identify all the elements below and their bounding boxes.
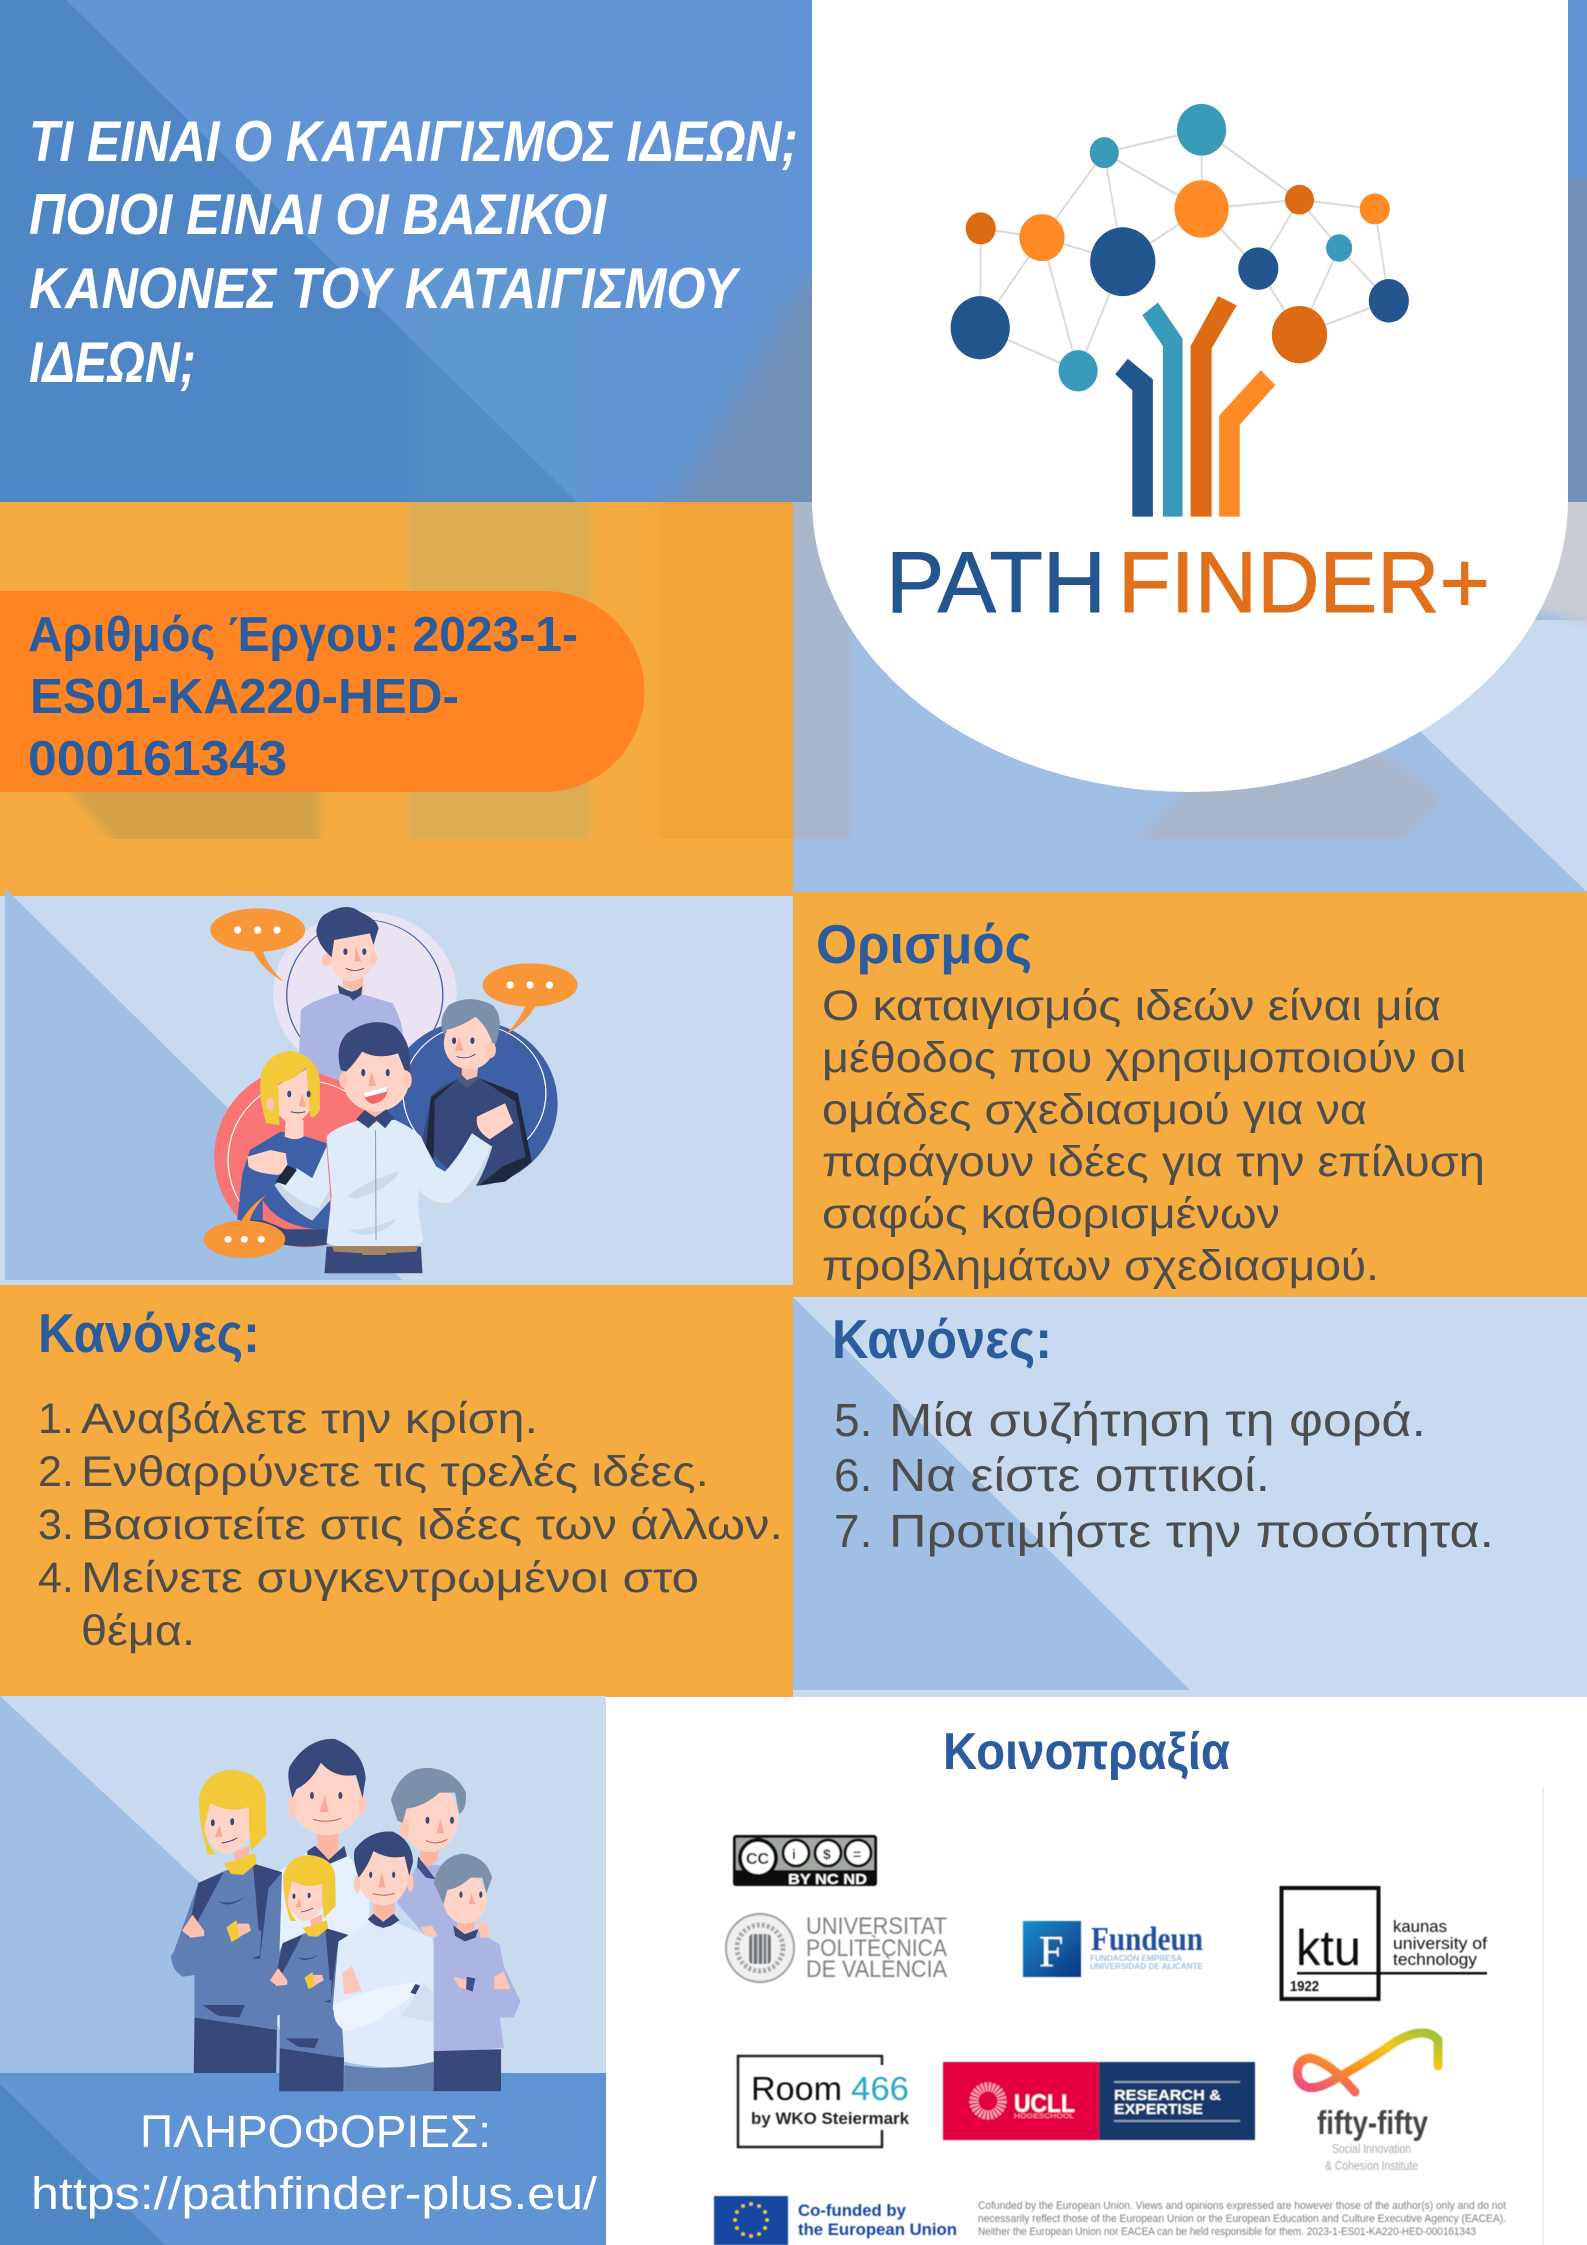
heading: definition: Ορισμός [816, 913, 1032, 975]
logo: KTU: 1922 [1290, 1978, 1319, 1995]
callout: project number pill [0, 591, 644, 792]
definition text: Ο καταιγισμός ιδεών είναι μία [822, 982, 1441, 1030]
logo: co-funded by the European Union: the European Union [798, 2220, 957, 2239]
logo: creative commons badge [733, 1835, 877, 1888]
logo: Room 466 [738, 2056, 910, 2147]
logo: KTU [1282, 1888, 1487, 1999]
definition text [822, 982, 1485, 1290]
logo: creative commons badge: CC [746, 1851, 770, 1868]
logo: Fundeun: F [1039, 1927, 1063, 1976]
logo: creative commons badge: i [792, 1846, 796, 1862]
logo: fifty-fifty: & Cohesion Institute [1325, 2158, 1418, 2173]
definition text: σαφώς καθορισμένων [822, 1190, 1280, 1238]
logo: creative commons badge: = [853, 1846, 861, 1862]
logo: fifty-fifty: fifty-fifty [1317, 2104, 1429, 2141]
icon: Pathfinder tree logo [951, 104, 1409, 517]
callout: project number pill: 000161343 [28, 732, 287, 786]
logo: Fundeun: FUNDACIÓN EMPRESA [1090, 1954, 1182, 1963]
disclaimer text: Cofunded by the European Union. Views and opinions expressed are however those of the author(s) only and do not [978, 2200, 1506, 2212]
logo: Universitat Politecnica de Valencia: DE VALÈNCIA [806, 1956, 947, 1983]
logo: Fundeun: Fundeun [1091, 1921, 1203, 1958]
rules list 1-4: Ενθαρρύνετε τις τρελές ιδέες. [81, 1448, 709, 1496]
illustration: group of people talking [204, 907, 578, 1273]
logo: fifty-fifty: Social Innovation [1332, 2141, 1411, 2156]
logo: creative commons badge: $ [823, 1846, 831, 1862]
title: ΙΔΕΩΝ; [29, 330, 196, 395]
logo wordmark: FINDER+ [1118, 535, 1490, 631]
big woman [171, 1770, 282, 2073]
rules list 1-4: Βασιστείτε στις ιδέες των άλλων. [81, 1501, 783, 1549]
logo: Universitat Politecnica de Valencia: UNIVERSITAT [806, 1913, 947, 1940]
rules list 5-7: Να είστε οπτικοί. [889, 1449, 1270, 1501]
speaking man [274, 1147, 331, 1221]
logo: Universitat Politecnica de Valencia: POLITÈCNICA [806, 1935, 947, 1962]
big man [261, 1853, 370, 2044]
logo wordmark [886, 535, 1490, 631]
logo: KTU: ktu [1296, 1920, 1361, 1976]
bubbles [253, 951, 283, 982]
small older man [434, 1927, 520, 2055]
panel: team illustration and information [0, 1696, 606, 2245]
logo: co-funded by the European Union [714, 2196, 957, 2245]
information text: ΠΛΗΡΟΦΟΡΙΕΣ: [140, 2106, 491, 2157]
logo: Room 466: by WKO Steiermark [751, 2109, 910, 2128]
logo: Room 466: 466 [851, 2070, 909, 2107]
rules list 5-7: 6. [834, 1449, 872, 1501]
logo: UCLL research and expertise [943, 2062, 1255, 2140]
logo: fifty-fifty [1298, 2033, 1438, 2173]
information text [31, 2106, 598, 2219]
logo: Fundeun [1023, 1921, 1204, 1977]
rules list 5-7: Μία συζήτηση τη φορά. [889, 1394, 1426, 1446]
title [29, 109, 798, 395]
rules list 1-4: Μείνετε συγκεντρωμένοι στο [81, 1554, 699, 1602]
logo: Universitat Politecnica de Valencia [726, 1913, 947, 1983]
definition text: παράγουν ιδέες για την επίλυση [822, 1138, 1485, 1186]
rules list 5-7: Προτιμήστε την ποσότητα. [889, 1505, 1494, 1557]
callout: project number pill: Αριθμός Έργου: 2023-1- [28, 608, 578, 662]
panel: consortium logos [606, 1697, 1587, 2245]
logo wordmark: PATH [886, 535, 1106, 631]
panel: rules 5-7 [793, 1297, 1587, 1697]
callout: project number pill: ES01-KA220-HED- [30, 670, 459, 724]
rules list 1-4: 1. [38, 1395, 74, 1443]
panel: rules 1-4 [0, 1285, 793, 1697]
logo: co-funded by the European Union: Co-funded by [798, 2201, 907, 2220]
logo: Fundeun: UNIVERSIDAD DE ALICANTE [1090, 1962, 1204, 1971]
definition text: μέθοδος που χρησιμοποιούν οι [822, 1034, 1466, 1082]
rules list 1-4: 2. [38, 1448, 74, 1496]
logo: UCLL research and expertise: RESEARCH & [1114, 2087, 1221, 2104]
rules list 1-4: Αναβάλετε την κρίση. [81, 1395, 538, 1443]
rules list 1-4: 4. [38, 1554, 74, 1602]
logo: KTU: kaunas [1393, 1917, 1447, 1936]
logo: KTU: technology [1393, 1950, 1478, 1969]
title: ΚΑΝΟΝΕΣ ΤΟΥ ΚΑΤΑΙΓΙΣΜΟΥ [29, 256, 742, 321]
disclaimer text: necessarily reflect those of the European Union or the European Education and Culture Executive Agency (EACEA). [978, 2213, 1506, 2225]
blonde woman [237, 1132, 332, 1230]
small woman [261, 1855, 348, 2091]
logo: UCLL research and expertise: EXPERTISE [1114, 2101, 1203, 2118]
disclaimer text: Neither the European Union nor EACEA can be held responsible for them. 2023-1-ES01-KA220-HED-000161343 [978, 2226, 1476, 2238]
rules list 1-4 [38, 1395, 783, 1655]
rules list 1-4: 3. [38, 1501, 74, 1549]
title: ΤΙ ΕΙΝΑΙ Ο ΚΑΤΑΙΓΙΣΜΟΣ ΙΔΕΩΝ; [29, 109, 798, 174]
back man [298, 993, 403, 1087]
illustration: team of six people [171, 1739, 520, 2091]
rules list 1-4: θέμα. [81, 1607, 195, 1655]
information text: https://pathfinder-plus.eu/ [31, 2168, 598, 2219]
front man [333, 1924, 443, 2067]
logo: KTU: university of [1393, 1934, 1487, 1953]
logo: Room 466: Room [751, 2070, 842, 2107]
heading: rules right: Κανόνες: [832, 1308, 1052, 1370]
rules list 5-7: 7. [834, 1505, 872, 1557]
big older man [397, 1863, 459, 1938]
panel: top blue header background [0, 0, 1587, 550]
heading: consortium: Κοινοπραξία [943, 1723, 1230, 1781]
panel: light blue background behind logo [770, 490, 1587, 893]
heading: rules left: Κανόνες: [38, 1302, 260, 1364]
older man [421, 1077, 532, 1185]
rules list 5-7 [834, 1394, 1494, 1557]
panel: orange project number background [0, 490, 818, 896]
definition text: προβλημάτων σχεδιασμού. [822, 1242, 1379, 1290]
disclaimer text [978, 2200, 1506, 2238]
rules list 5-7: 5. [834, 1394, 872, 1446]
definition text: ομάδες σχεδιασμού για να [822, 1086, 1367, 1134]
logo: creative commons badge: BY NC ND [788, 1871, 867, 1888]
panel: white logo shield [812, 0, 1568, 792]
panel: discussion illustration [0, 888, 793, 1285]
title: ΠΟΙΟΙ ΕΙΝΑΙ ΟΙ ΒΑΣΙΚΟΙ [29, 182, 608, 247]
panel: definition [793, 892, 1587, 1297]
logo: UCLL research and expertise: HOGESCHOOL [1014, 2114, 1075, 2120]
logo: UCLL research and expertise: UCLL [1014, 2090, 1075, 2118]
